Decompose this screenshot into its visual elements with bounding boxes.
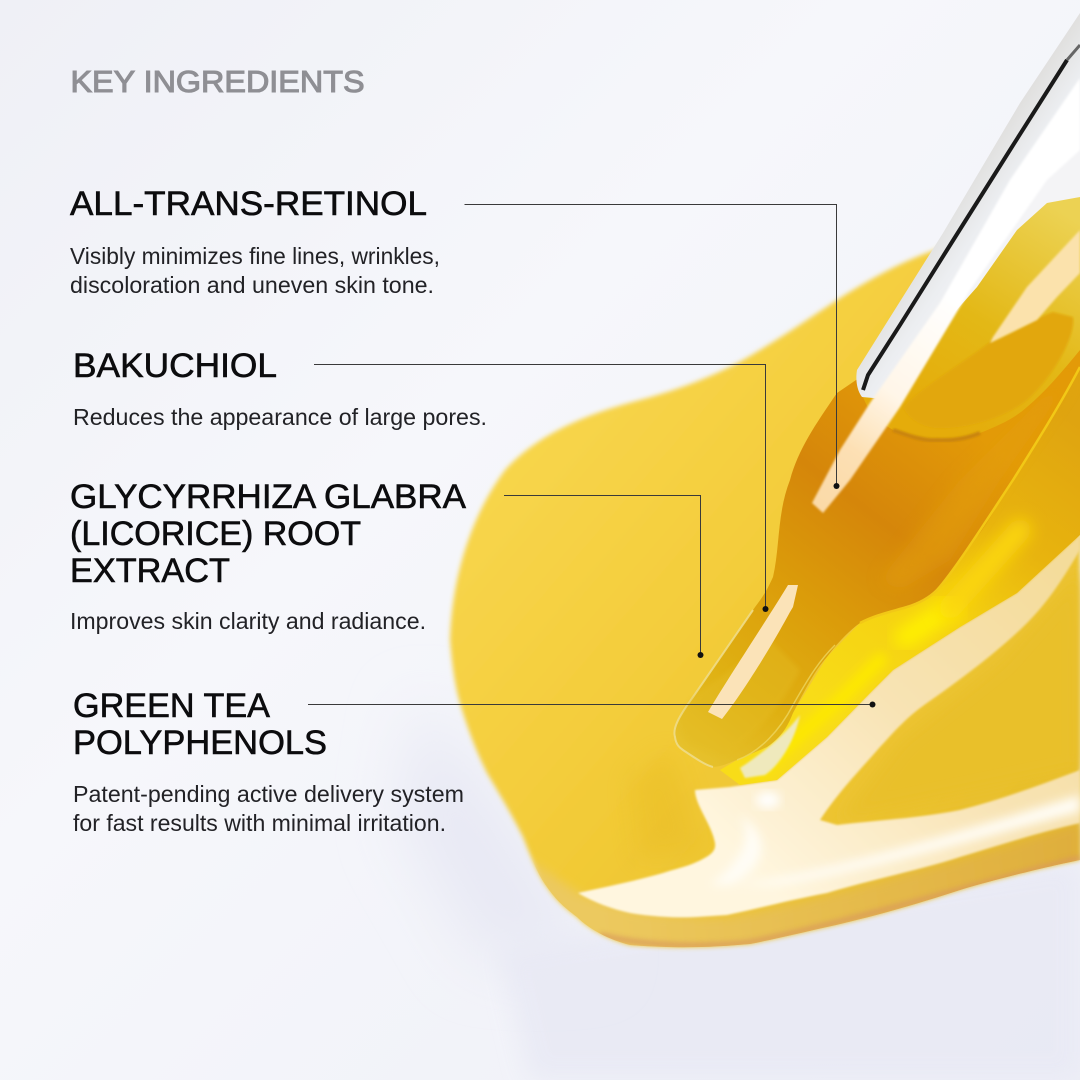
oil blob <box>450 150 1080 960</box>
dark inner line <box>863 60 1067 390</box>
peach reflection <box>990 230 1080 343</box>
ingredient: glycyrrhiza glabra: GLYCYRRHIZA GLABRA <box>70 478 466 516</box>
white reflection on oil <box>578 535 1080 917</box>
title: KEY INGREDIENTS <box>70 64 364 99</box>
oil pool inside dropper <box>863 197 1080 440</box>
ingredient: green tea polyphenols: for fast results with minimal irritation. <box>73 810 446 836</box>
lighter inner tip <box>682 640 800 755</box>
ingredient: green tea polyphenols: POLYPHENOLS <box>73 724 327 762</box>
lower tube highlight <box>708 585 798 719</box>
rim of oil <box>530 822 1080 960</box>
ingredient: green tea polyphenols <box>73 687 464 836</box>
white highlight band <box>812 78 1080 513</box>
ingredient: all-trans-retinol: Visibly minimizes fine lines, wrinkles, <box>70 243 440 269</box>
lighter strip along tube edge <box>880 380 1070 590</box>
ingredient: glycyrrhiza glabra <box>70 478 466 634</box>
ingredient: green tea polyphenols: Patent-pending active delivery system <box>73 781 464 807</box>
dropper oil-filled tip <box>674 260 1080 767</box>
ingredient: bakuchiol: Reduces the appearance of large pores. <box>73 404 487 430</box>
callout line: all-trans-retinol <box>464 204 840 489</box>
glass tube <box>856 13 1080 400</box>
dropper <box>674 13 1080 767</box>
ingredient: glycyrrhiza glabra: Improves skin clarity and radiance. <box>70 608 426 634</box>
ingredient: all-trans-retinol: discoloration and uneven skin tone. <box>70 272 434 298</box>
ingredient: glycyrrhiza glabra: (LICORICE) ROOT <box>70 515 361 553</box>
shadow near dropper tip <box>643 774 684 846</box>
ingredient: glycyrrhiza glabra: EXTRACT <box>70 552 230 590</box>
ingredient: bakuchiol <box>73 347 487 430</box>
callout line: green tea polyphenols <box>308 702 876 708</box>
callout line: bakuchiol <box>314 364 768 612</box>
bright yellow glow <box>720 367 1080 785</box>
ingredient: all-trans-retinol <box>70 185 440 298</box>
gold area below band <box>870 566 1080 802</box>
callout line: glycyrrhiza glabra <box>504 496 704 658</box>
inner lens <box>903 312 1073 428</box>
tube outline <box>674 610 753 767</box>
ingredient: green tea polyphenols: GREEN TEA <box>73 687 270 725</box>
ingredient: all-trans-retinol: ALL-TRANS-RETINOL <box>70 185 427 223</box>
ingredient: bakuchiol: BAKUCHIOL <box>73 347 277 385</box>
